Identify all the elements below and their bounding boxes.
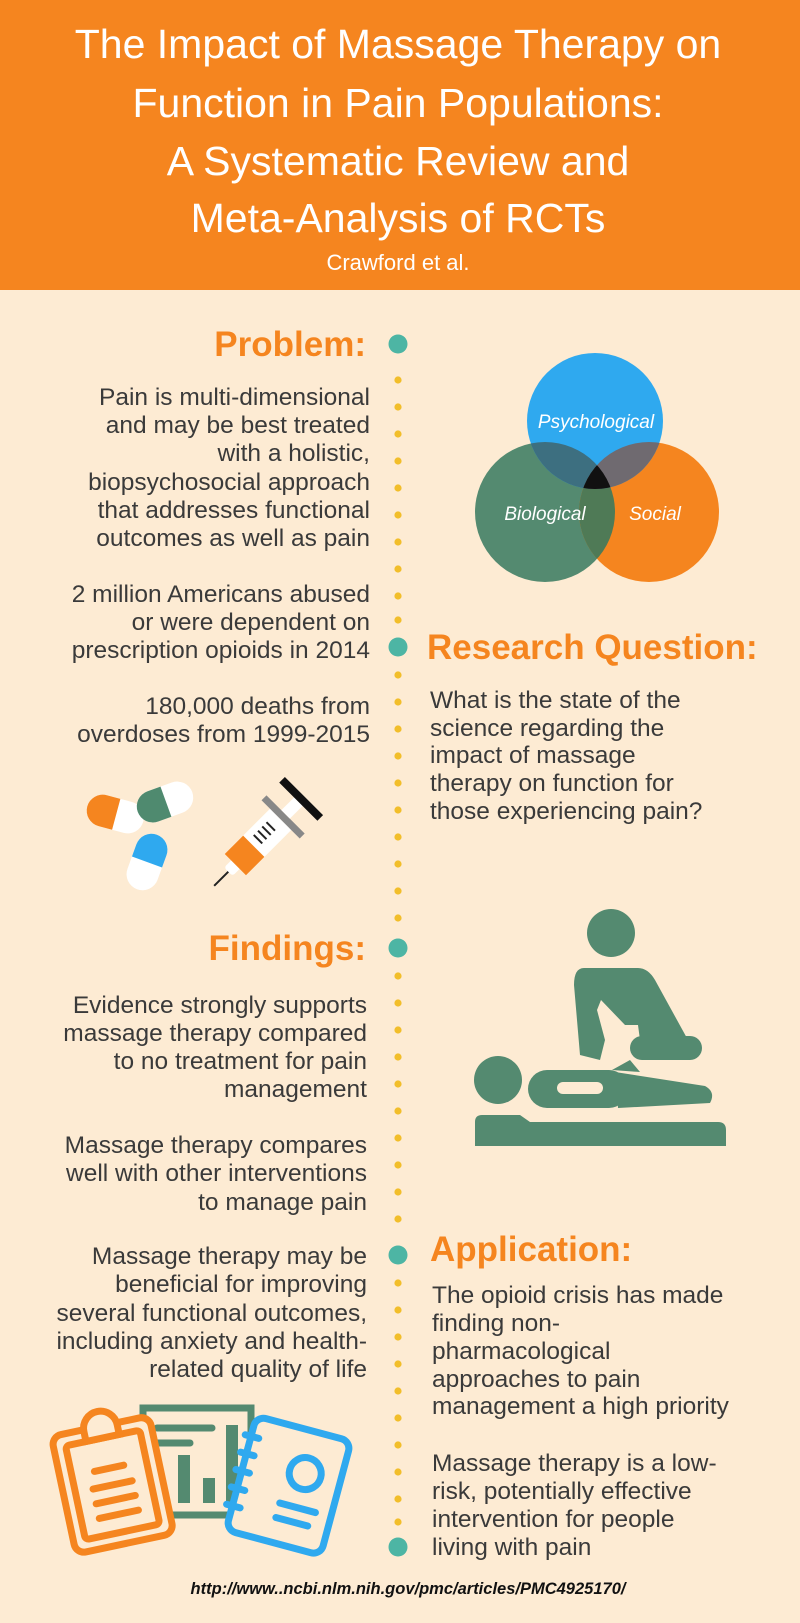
icon: pills xyxy=(83,777,198,895)
heading: Application: Application: xyxy=(430,1230,632,1269)
problem text: with a holistic, xyxy=(216,440,370,467)
problem text: 180,000 deaths from xyxy=(145,693,370,720)
findings text: several functional outcomes, xyxy=(56,1300,367,1327)
chart board xyxy=(143,1408,251,1515)
findings text: well with other interventions xyxy=(65,1160,367,1187)
problem text: Pain is multi-dimensional xyxy=(99,384,370,411)
application text xyxy=(432,1282,730,1561)
application text: approaches to pain xyxy=(432,1366,640,1393)
problem text: biopsychosocial approach xyxy=(88,469,370,496)
research question text: science regarding the xyxy=(430,715,664,742)
findings text: beneficial for improving xyxy=(115,1271,367,1298)
title: The Impact of Massage Therapy on xyxy=(75,21,721,67)
research question text: those experiencing pain? xyxy=(430,798,702,825)
heading: Research Question: Research Question: xyxy=(427,628,758,667)
venn diagram xyxy=(475,353,719,582)
application text: finding non- xyxy=(432,1310,560,1337)
findings text: massage therapy compared xyxy=(63,1020,367,1047)
application text: pharmacological xyxy=(432,1338,610,1365)
icon: documents xyxy=(48,1401,351,1555)
title: Function in Pain Populations: xyxy=(132,80,664,126)
findings text: management xyxy=(224,1076,367,1103)
icon: massage therapist xyxy=(474,909,726,1146)
heading: Findings: Findings: xyxy=(209,929,366,968)
findings text: to manage pain xyxy=(198,1189,367,1216)
problem text: overdoses from 1999-2015 xyxy=(77,721,370,748)
application text: living with pain xyxy=(432,1534,591,1561)
title: A Systematic Review and xyxy=(167,138,629,184)
title xyxy=(75,21,721,241)
problem text: prescription opioids in 2014 xyxy=(72,637,370,664)
findings text: related quality of life xyxy=(149,1356,367,1383)
author: Crawford et al. xyxy=(326,250,470,275)
findings text: Massage therapy compares xyxy=(65,1132,367,1159)
source url: http://www..ncbi.nlm.nih.gov/pmc/articles/PMC4925170/ xyxy=(191,1580,628,1598)
problem text: outcomes as well as pain xyxy=(96,525,370,552)
problem text: 2 million Americans abused xyxy=(72,581,370,608)
venn diagram: Biological xyxy=(504,504,586,525)
icon: syringe xyxy=(195,777,323,905)
research question text xyxy=(430,687,702,825)
notebook xyxy=(220,1414,351,1555)
findings text: to no treatment for pain xyxy=(114,1048,367,1075)
findings text: Evidence strongly supports xyxy=(73,992,367,1019)
problem text xyxy=(72,384,370,748)
header banner xyxy=(0,0,800,290)
findings text xyxy=(56,992,367,1383)
clipboard xyxy=(48,1401,174,1554)
problem text: or were dependent on xyxy=(132,609,370,636)
application text: management a high priority xyxy=(432,1393,730,1420)
research question text: What is the state of the xyxy=(430,687,681,714)
venn diagram: Social xyxy=(629,504,682,525)
application text: intervention for people xyxy=(432,1506,674,1533)
findings text: including anxiety and health- xyxy=(56,1328,367,1355)
timeline xyxy=(388,334,408,1556)
application text: The opioid crisis has made xyxy=(432,1282,723,1309)
research question text: therapy on function for xyxy=(430,770,674,797)
research question text: impact of massage xyxy=(430,742,636,769)
heading: Problem: Problem: xyxy=(214,325,366,364)
findings text: Massage therapy may be xyxy=(92,1243,367,1270)
title: Meta-Analysis of RCTs xyxy=(191,195,605,241)
venn diagram: Psychological xyxy=(538,412,655,433)
application text: risk, potentially effective xyxy=(432,1478,692,1505)
application text: Massage therapy is a low- xyxy=(432,1450,717,1477)
problem text: and may be best treated xyxy=(106,412,370,439)
problem text: that addresses functional xyxy=(98,497,370,524)
